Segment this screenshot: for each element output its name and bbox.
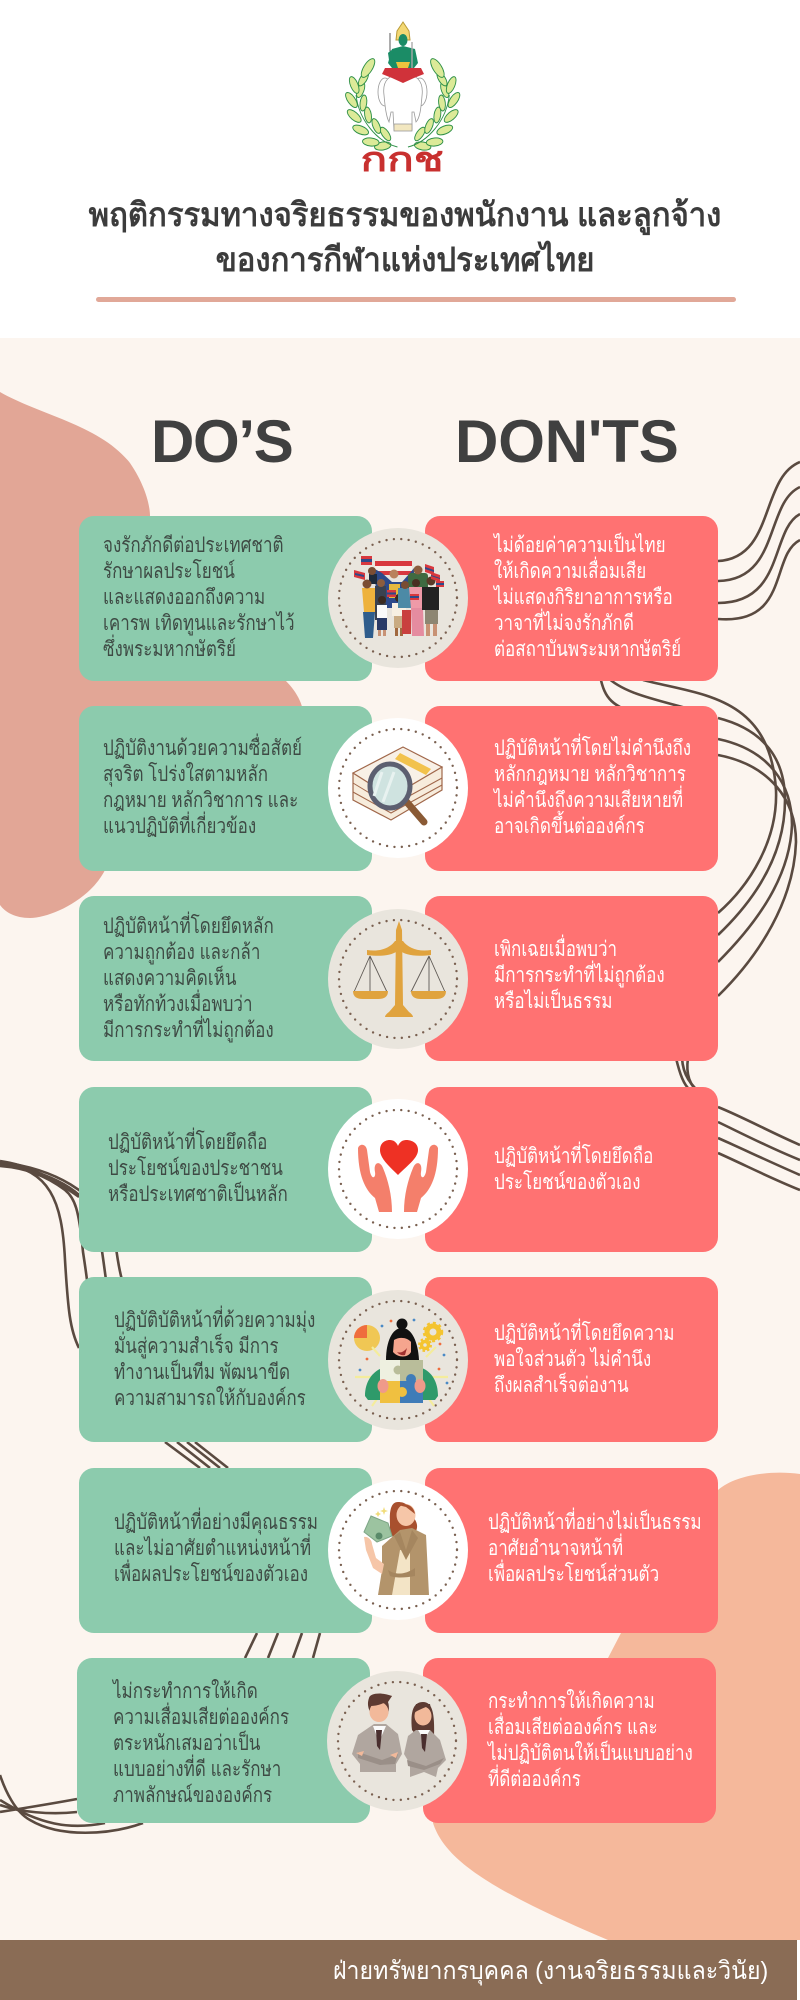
heading: DON'TS: DON'TS [455,408,679,475]
don't card 7: เสื่อมเสียต่อองค์กร และ [488,1716,658,1739]
don't card 1: ต่อสถาบันพระมหากษัตริย์ [494,638,681,661]
do card 1: รักษาผลประโยชน์ [103,560,235,583]
row 1 [79,516,718,681]
don't card 4 [425,1087,718,1252]
do card 3: แสดงความคิดเห็น [103,967,236,990]
do card 1: จงรักภักดีต่อประเทศชาติ [103,534,284,557]
do card 7: แบบอย่างที่ดี และรักษา [113,1758,281,1781]
don't card 6: อาศัยอำนาจหน้าที่ [488,1537,623,1560]
do card 1: เคารพ เทิดทูนและรักษาไว้ [103,612,295,635]
don't card 3: มีการกระทำที่ไม่ถูกต้อง [494,964,665,987]
curved lines [0,462,800,1833]
don't card 7: ที่ดีต่อองค์กร [488,1768,581,1791]
left blob [0,392,304,918]
right laurel branch [408,56,462,151]
row 5 [79,1277,718,1442]
do card 5: ความสามารถให้กับองค์กร [114,1387,306,1410]
row 3 [79,896,718,1061]
do card 3 [79,896,372,1061]
header panel [0,0,800,338]
don't card 3 [425,896,718,1061]
do card 6: ปฏิบัติหน้าที่อย่างมีคุณธรรม [114,1511,318,1534]
don't card 7 [423,1658,716,1823]
do card 4: ประโยชน์ของประชาชน [108,1157,283,1180]
don't card 1: ไม่แสดงกิริยาอาการหรือ [494,586,673,609]
deity figure [382,22,424,83]
do card 3: ปฏิบัติหน้าที่โดยยึดหลัก [103,915,274,938]
don't card 1: ไม่ด้อยค่าความเป็นไทย [494,534,666,557]
don't card 2: หลักกฎหมาย หลักวิชาการ [494,763,686,786]
don't card 2 [425,706,718,871]
title: พฤติกรรมทางจริยธรรมของพนักงาน และลูกจ้าง [89,196,721,233]
do card 2: ปฏิบัติงานด้วยความซื่อสัตย์ [103,737,302,760]
title [88,196,721,278]
footer [0,1940,797,2000]
do card 2: แนวปฏิบัติที่เกี่ยวข้อง [103,815,256,838]
don't card 6: เพื่อผลประโยชน์ส่วนตัว [488,1563,659,1586]
don't card 1 [425,516,718,681]
do card 3: หรือทักท้วงเมื่อพบว่า [103,993,253,1016]
don't card 3: เพิกเฉยเมื่อพบว่า [494,938,617,961]
logo letters: กกช [360,141,444,179]
row 4 [79,1087,718,1252]
logo: sports authority of thailand emblem [345,21,460,179]
icon: scales of justice [328,909,468,1049]
row 6 [79,1468,718,1633]
do card 5: มั่นสู่ความสำเร็จ มีการ [114,1335,279,1358]
don't card 4: ปฏิบัติหน้าที่โดยยึดถือ [494,1145,653,1168]
don't card 5: ถึงผลสำเร็จต่องาน [494,1374,629,1397]
title underline [96,297,736,302]
do card 6: เพื่อผลประโยชน์ของตัวเอง [114,1563,308,1586]
do card 7 [77,1658,370,1823]
do card 4: ปฏิบัติหน้าที่โดยยึดถือ [108,1131,267,1154]
heading: DO'S: DO’S [151,408,292,475]
don't card 1: ให้เกิดความเสื่อมเสีย [494,560,646,583]
don't card 3: หรือไม่เป็นธรรม [494,990,612,1013]
don't card 5: พอใจส่วนตัว ไม่คำนึง [494,1348,651,1371]
don't card 5 [425,1277,718,1442]
do card 5: ปฏิบัติบัติหน้าที่ด้วยความมุ่ง [114,1309,315,1332]
don't card 4: ประโยชน์ของตัวเอง [494,1171,640,1194]
don't card 7: กระทำการให้เกิดความ [488,1690,655,1713]
icon: woman holding money [328,1480,468,1620]
do card 4 [79,1087,372,1252]
do card 4: หรือประเทศชาติเป็นหลัก [108,1183,288,1206]
footer text: ฝ่ายทรัพยากรบุคคล (งานจริยธรรมและวินัย) [333,1957,768,1985]
do card 1 [79,516,372,681]
don't card 2: อาจเกิดขึ้นต่อองค์กร [494,815,645,838]
do card 5: ทำงานเป็นทีม พัฒนาขีด [114,1361,290,1384]
do card 7: ไม่กระทำการให้เกิด [113,1680,258,1703]
don't card 5: ปฏิบัติหน้าที่โดยยึดความ [494,1322,675,1345]
do card 7: ภาพลักษณ์ขององค์กร [113,1784,272,1807]
do card 3: ความถูกต้อง และกล้า [103,941,260,964]
do card 2: กฎหมาย หลักวิชาการ และ [103,789,298,812]
don't card 2: ปฏิบัติหน้าที่โดยไม่คำนึงถึง [494,737,691,760]
icon: two employees in suits [327,1671,467,1811]
do card 5 [79,1277,372,1442]
title: ของการกีฬาแห่งประเทศไทย [216,241,594,278]
icon: woman holding puzzle [328,1290,468,1430]
don't card 6 [425,1468,718,1633]
do card 2 [79,706,372,871]
row 7 [77,1658,716,1823]
icon: thai people with flags [328,528,468,668]
elephant [378,74,427,131]
don't card 7: ไม่ปฏิบัติตนให้เป็นแบบอย่าง [488,1742,693,1765]
do card 6: และไม่อาศัยตำแหน่งหน้าที่ [114,1537,311,1560]
do card 1: และแสดงออกถึงความ [103,586,265,609]
row 2 [79,706,718,871]
icon: hands holding heart [328,1099,468,1239]
left laurel branch [343,56,397,151]
don't card 1: วาจาที่ไม่จงรักภักดี [494,612,634,635]
do card 3: มีการกระทำที่ไม่ถูกต้อง [103,1019,274,1042]
do card 6 [79,1468,372,1633]
do card 7: ความเสื่อมเสียต่อองค์กร [113,1706,289,1729]
icon: magnifier over documents [328,718,468,858]
do card 2: สุจริต โปร่งใสตามหลัก [103,763,268,786]
don't card 6: ปฏิบัติหน้าที่อย่างไม่เป็นธรรม [488,1511,702,1534]
do card 1: ซึ่งพระมหากษัตริย์ [103,638,236,661]
do card 7: ตระหนักเสมอว่าเป็น [113,1732,260,1755]
don't card 2: ไม่คำนึงถึงความเสียหายที่ [494,789,683,812]
right blob [433,1473,800,1940]
